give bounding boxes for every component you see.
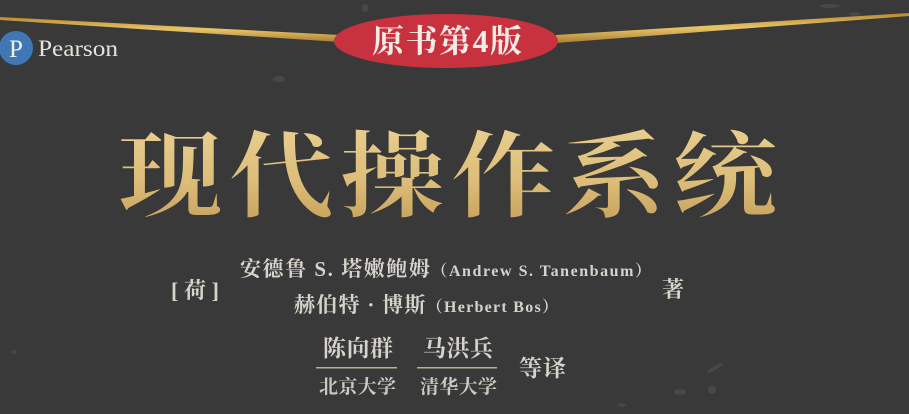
translator: Chen Xiangqun — [316, 336, 397, 398]
translator: Chen Xiangqun: 北京大学 — [319, 375, 396, 398]
Pearson logo — [0, 31, 119, 65]
title: 现代操作系统 — [118, 125, 783, 230]
translator suffix: 等译 — [519, 356, 566, 381]
gold rule: left — [0, 17, 340, 42]
edition badge: 原书第4版 — [372, 23, 522, 59]
translator: Ma Hongbing — [417, 336, 497, 398]
author suffix: 著 — [662, 277, 684, 302]
edition badge — [334, 14, 558, 68]
author 2: 赫伯特 · 博斯（Herbert Bos） — [294, 293, 558, 317]
translator: Chen Xiangqun: 陈向群 — [323, 336, 393, 361]
author 1: 安德鲁 S. 塔嫩鲍姆（Andrew S. Tanenbaum） — [240, 257, 651, 281]
Pearson wordmark: Pearson — [38, 36, 119, 61]
gold rule: right — [556, 13, 909, 43]
icon: Pearson P: P — [9, 36, 23, 63]
translator: Ma Hongbing: 清华大学 — [420, 376, 497, 398]
translator: Ma Hongbing: 马洪兵 — [423, 336, 494, 361]
nationality: [ 荷 ] — [171, 278, 219, 303]
